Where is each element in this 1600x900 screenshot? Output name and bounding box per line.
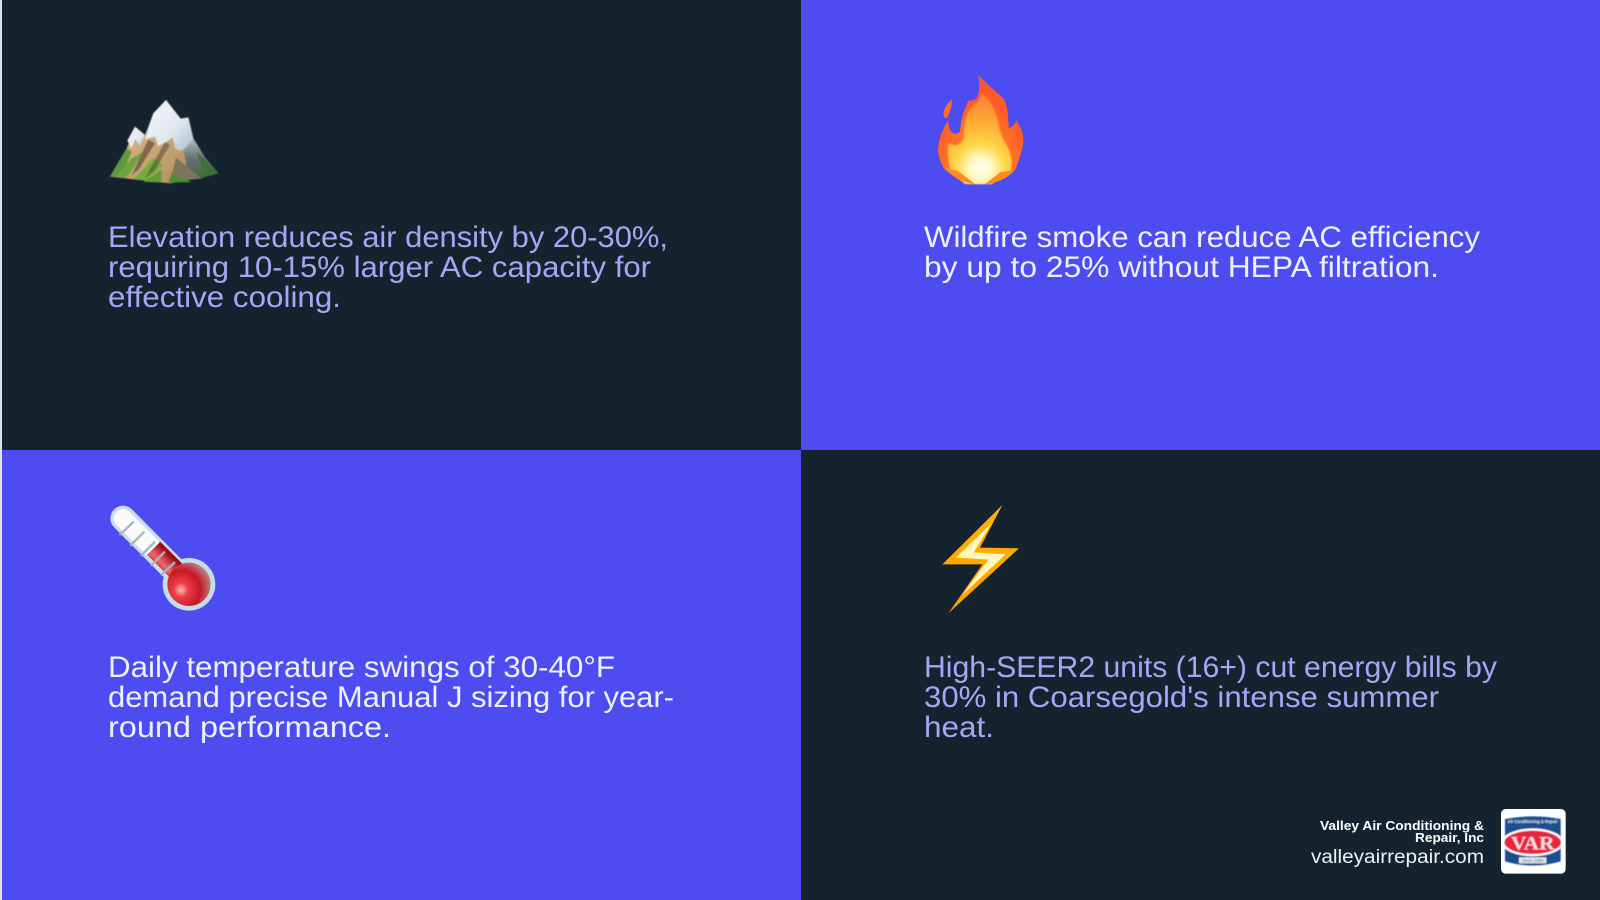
text: elevation fact	[108, 221, 668, 314]
panel: wildfire	[801, 0, 1600, 450]
icon: snow-capped mountain	[110, 100, 218, 183]
text: elevation fact: effective cooling.	[108, 281, 341, 314]
logo: VAR badge	[1501, 809, 1566, 874]
icon: fire	[938, 75, 1023, 184]
text: temperature fact: demand precise Manual J sizing for year-	[108, 681, 674, 714]
text: wildfire fact: Wildfire smoke can reduce AC efficiency	[924, 221, 1480, 254]
text: temperature fact: round performance.	[108, 711, 391, 744]
logo: VAR badge: Air Conditioning & Repair	[1508, 819, 1558, 824]
text: temperature fact	[108, 651, 674, 744]
text: energy fact	[924, 651, 1497, 744]
text: wildfire fact: by up to 25% without HEPA filtration.	[924, 251, 1439, 284]
brand: company name and URL: Valley Air Conditioning &	[1320, 818, 1484, 833]
text: energy fact: 30% in Coarsegold's intense summer	[924, 681, 1439, 714]
icon: thermometer	[120, 518, 215, 611]
icon: lightning bolt	[942, 505, 1019, 613]
text: energy fact: High-SEER2 units (16+) cut energy bills by	[924, 651, 1497, 684]
panel: energy	[801, 450, 1600, 900]
brand: company name and URL	[1311, 818, 1484, 868]
text: wildfire fact	[924, 221, 1480, 284]
logo: VAR badge: Since 1985	[1522, 858, 1544, 863]
brand: company name and URL: valleyairrepair.com	[1311, 847, 1484, 868]
panel: elevation	[2, 0, 801, 450]
brand: company name and URL: Repair, Inc	[1415, 830, 1484, 845]
text: elevation fact: requiring 10-15% larger AC capacity for	[108, 251, 651, 284]
panel: temperature swings	[2, 450, 801, 900]
logo: VAR badge: VAR	[1511, 834, 1555, 855]
text: temperature fact: Daily temperature swings of 30-40°F	[108, 651, 615, 684]
text: energy fact: heat.	[924, 711, 994, 744]
text: elevation fact: Elevation reduces air density by 20-30%,	[108, 221, 668, 254]
